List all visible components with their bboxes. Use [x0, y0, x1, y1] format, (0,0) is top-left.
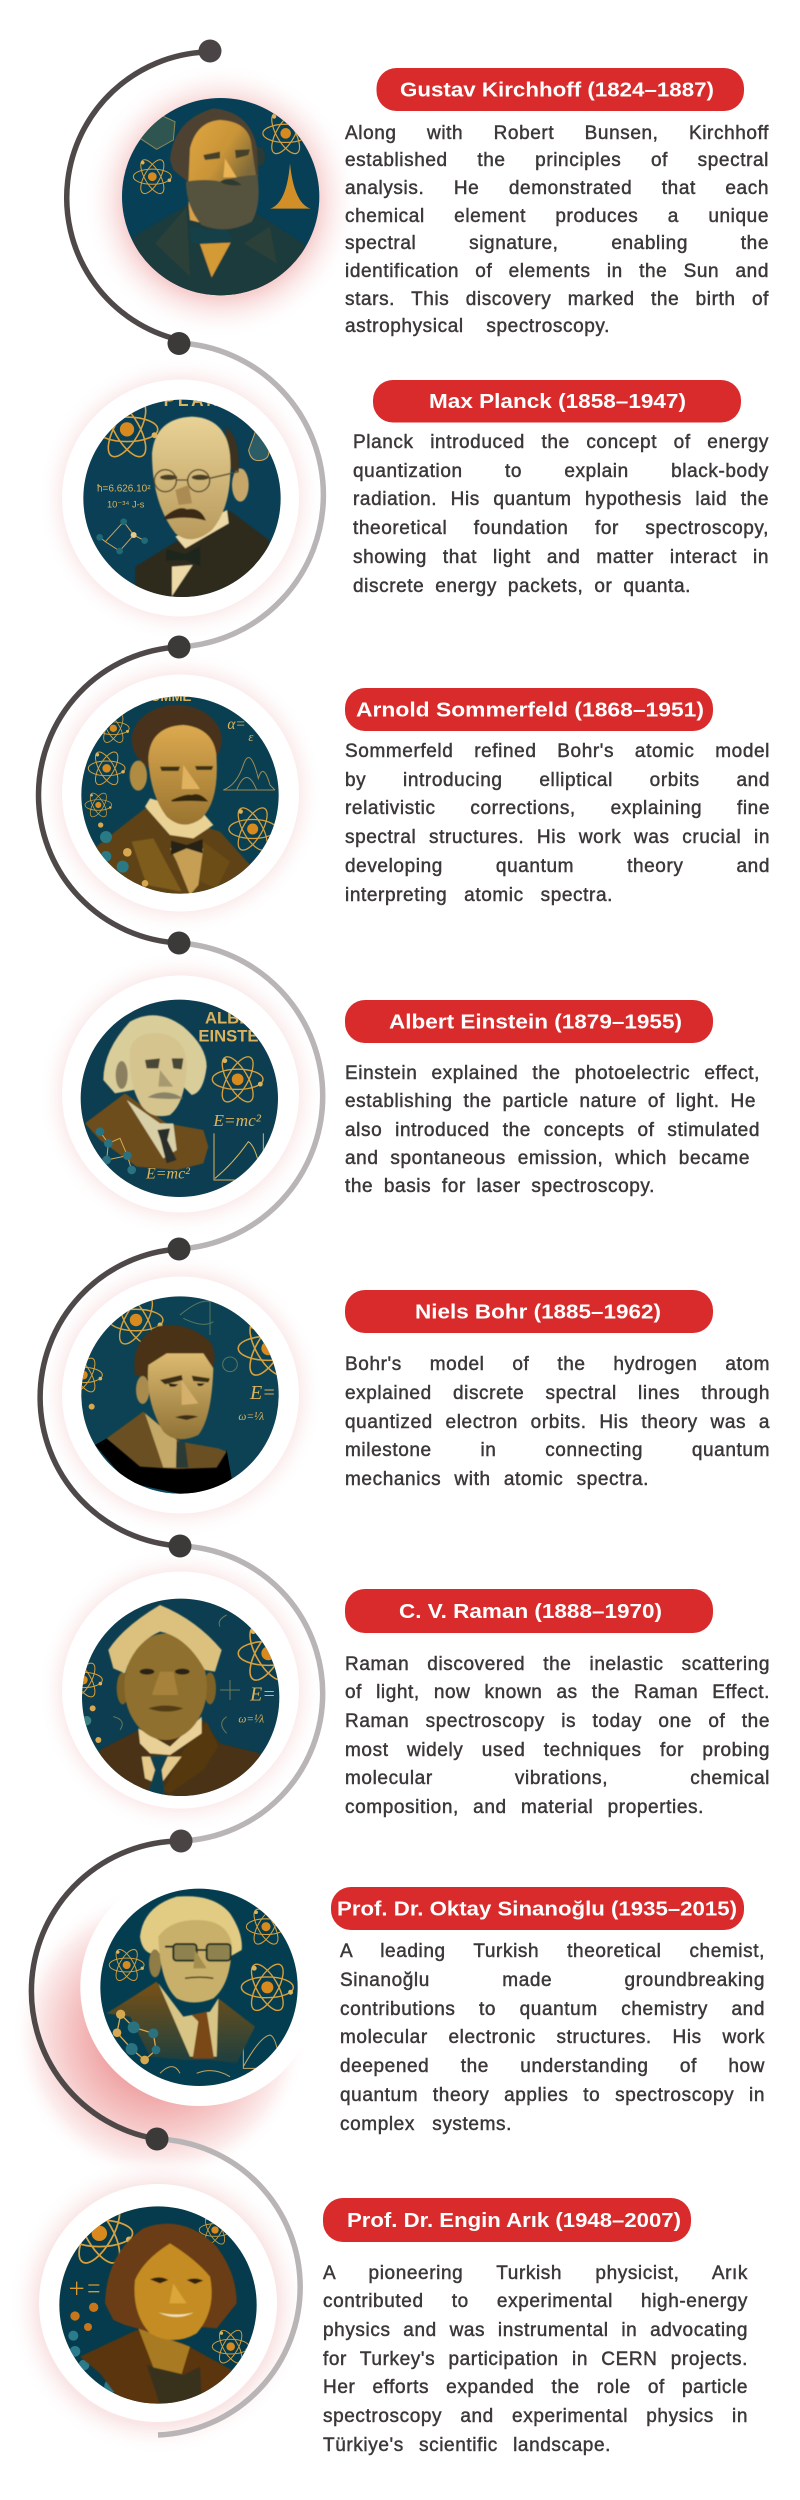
glow: Kirchhoff	[83, 63, 359, 339]
text: Sinanoglu: contributions to quantum chemistry and	[340, 1998, 765, 2020]
text: Raman: molecular vibrations, chemical	[345, 1768, 770, 1789]
portrait: Max Planck	[62, 380, 299, 616]
portrait: Albert Einstein: EINSTEIN	[198, 1027, 275, 1046]
text: Sinanoglu	[340, 1941, 765, 2134]
text: Kirchhoff	[344, 122, 769, 337]
text: Raman: composition, and material properties.	[345, 1797, 704, 1818]
title pill: Engin Arik	[323, 2198, 691, 2242]
text: Sinanoglu: deepened the understanding of how	[340, 2056, 765, 2077]
text: Raman: of light, now known as the Raman Effect.	[345, 1682, 770, 1703]
text: Einstein: the basis for laser spectroscopy.	[345, 1176, 655, 1197]
text: Bohr: explained discrete spectral lines through	[345, 1383, 770, 1404]
title pill: Niels Bohr	[345, 1290, 713, 1333]
title pill: Albert Einstein: Albert Einstein (1879–1955)	[389, 1010, 682, 1034]
text: Sinanoglu: Sinanoğlu made groundbreaking	[340, 1970, 765, 1991]
text: Planck: showing that light and matter interact in	[353, 547, 769, 568]
title pill: Albert Einstein	[345, 1000, 713, 1043]
portrait: Oktay Sinanoglu	[80, 1888, 298, 2106]
text: Arik: spectroscopy and experimental physics in	[323, 2406, 748, 2427]
text: Sommerfeld	[345, 741, 770, 906]
text: Sinanoglu: quantum theory applies to spectroscopy in	[340, 2085, 765, 2106]
timeline: connecting arcs and nodes	[31, 40, 323, 2435]
text: Arik: Her efforts expanded the role of particle	[323, 2377, 748, 2398]
title pill: Arnold Sommerfeld	[345, 688, 713, 731]
text: Planck: quantization to explain black-body	[353, 461, 769, 482]
text: Planck: discrete energy packets, or quanta.	[353, 576, 691, 597]
portrait: Max Planck: PLAN	[164, 390, 222, 410]
title pill: Arnold Sommerfeld: Arnold Sommerfeld (1868–1951)	[356, 698, 704, 722]
text: Einstein	[345, 1063, 760, 1197]
text: Bohr: quantized electron orbits. His theory was a	[345, 1412, 770, 1433]
text: Bohr	[345, 1354, 770, 1490]
portrait: Niels Bohr: E=	[249, 1382, 276, 1404]
portrait: Gustav Kirchhoff	[122, 98, 320, 296]
portrait: Niels Bohr: ω=¹⁄λ	[238, 1411, 264, 1423]
text: Kirchhoff: stars. This discovery marked the birth of	[345, 289, 769, 310]
portrait: Albert Einstein: E=mc²	[212, 1111, 262, 1130]
text: Sommerfeld: Sommerfeld refined Bohr's atomic model	[345, 741, 770, 762]
text: Einstein: establishing the particle nature of light. He	[345, 1091, 756, 1112]
portrait: Max Planck: 10⁻³⁴ J-s	[107, 499, 145, 509]
text: Bohr: milestone in connecting quantum	[345, 1440, 770, 1461]
portrait: Max Planck: ħ=6.626.10²	[97, 484, 151, 495]
text: Raman: most widely used techniques for probing	[345, 1740, 770, 1761]
text: Einstein: Einstein explained the photoelectric effect,	[345, 1063, 760, 1084]
title pill: Niels Bohr: Niels Bohr (1885–1962)	[415, 1300, 661, 1324]
text: Arik: for Turkey's participation in CERN projects.	[323, 2349, 748, 2370]
portrait: Engin Arik	[39, 2184, 277, 2422]
text: Arik	[322, 2262, 748, 2456]
glow: Bohr	[38, 1252, 324, 1538]
text: Planck: theoretical foundation for spectroscopy,	[353, 518, 769, 539]
text: Einstein: and spontaneous emission, which became	[345, 1148, 750, 1169]
title pill: Max Planck: Max Planck (1858–1947)	[429, 390, 686, 413]
text: Bohr: Bohr's model of the hydrogen atom	[345, 1354, 770, 1375]
text: Arik: physics and was instrumental in advocating	[323, 2320, 748, 2341]
text: Planck: Planck introduced the concept of energy	[353, 432, 769, 453]
title pill: Oktay Sinanoglu: Prof. Dr. Oktay Sinanoğlu (1935–2015)	[337, 1898, 737, 1920]
text: Sinanoglu: complex systems.	[340, 2114, 512, 2134]
portrait: Albert Einstein: E=mc²	[145, 1165, 190, 1182]
portrait: Arnold Sommerfeld	[62, 674, 299, 912]
text: Kirchhoff: established the principles of spectral	[345, 150, 769, 171]
portrait: Arnold Sommerfeld: α=	[227, 716, 246, 733]
text: Raman	[345, 1654, 770, 1818]
text: Raman: Raman spectroscopy is today one of the	[345, 1711, 770, 1732]
glow: Arik	[8, 2155, 308, 2455]
title pill: Max Planck	[373, 380, 741, 422]
text: Arik: Türkiye's scientific landscape.	[323, 2435, 611, 2456]
text: Einstein: also introduced the concepts of stimulated	[345, 1120, 760, 1141]
text: Raman: Raman discovered the inelastic scattering	[345, 1654, 770, 1674]
text: Planck: radiation. His quantum hypothesis laid the	[353, 489, 769, 510]
portrait: C. V. Raman	[62, 1572, 299, 1810]
text: Arik: contributed to experimental high-energy	[323, 2291, 748, 2312]
portrait: Arnold Sommerfeld: OMME	[150, 689, 192, 704]
text: Kirchhoff: Along with Robert Bunsen, Kirchhoff	[345, 122, 769, 144]
text: Kirchhoff: identification of elements in the Sun and	[345, 261, 769, 282]
glow: Planck	[38, 355, 324, 641]
portrait: Albert Einstein: ALBE	[205, 1008, 250, 1027]
text: Sommerfeld: relativistic corrections, explaining fine	[345, 798, 770, 819]
title pill: Engin Arik: Prof. Dr. Engin Arık (1948–2007)	[347, 2209, 681, 2232]
text: Sinanoglu: molecular electronic structures. His work	[340, 2027, 765, 2048]
text: Kirchhoff: analysis. He demonstrated that each	[345, 178, 769, 199]
text: Kirchhoff: spectral signature, enabling the	[345, 233, 769, 254]
portrait: C. V. Raman: ω=¹⁄λ	[238, 1714, 264, 1726]
text: Sinanoglu: A leading Turkish theoretical chemist,	[340, 1941, 765, 1962]
glow: Sommerfeld	[38, 650, 324, 936]
text: Sommerfeld: spectral structures. His work was crucial in	[345, 827, 770, 848]
title pill: Gustav Kirchhoff	[376, 68, 744, 111]
text: Bohr: mechanics with atomic spectra.	[345, 1469, 649, 1490]
title pill: Gustav Kirchhoff: Gustav Kirchhoff (1824–1887)	[400, 78, 714, 102]
portrait: Niels Bohr	[62, 1276, 299, 1514]
text: Planck	[353, 432, 769, 597]
text: Sommerfeld: interpreting atomic spectra.	[345, 885, 613, 906]
glow: Raman	[38, 1547, 324, 1833]
text: Kirchhoff: chemical element produces a unique	[345, 206, 769, 227]
text: Kirchhoff: astrophysical spectroscopy.	[345, 316, 610, 337]
portrait: Albert Einstein	[62, 976, 299, 1212]
glow: Einstein	[38, 951, 324, 1237]
title pill: Oktay Sinanoglu	[331, 1887, 744, 1930]
title pill: C. V. Raman	[345, 1589, 713, 1633]
text: Sommerfeld: by introducing elliptical orbits and	[345, 770, 770, 791]
glow: Sinanoglu	[12, 1887, 308, 2183]
portrait: C. V. Raman: E=	[249, 1684, 276, 1706]
text: Sommerfeld: developing quantum theory and	[345, 856, 770, 877]
text: Arik: A pioneering Turkish physicist, Arık	[323, 2262, 748, 2284]
title pill: C. V. Raman: C. V. Raman (1888–1970)	[399, 1600, 662, 1623]
portrait: Arnold Sommerfeld: ε	[248, 730, 253, 744]
